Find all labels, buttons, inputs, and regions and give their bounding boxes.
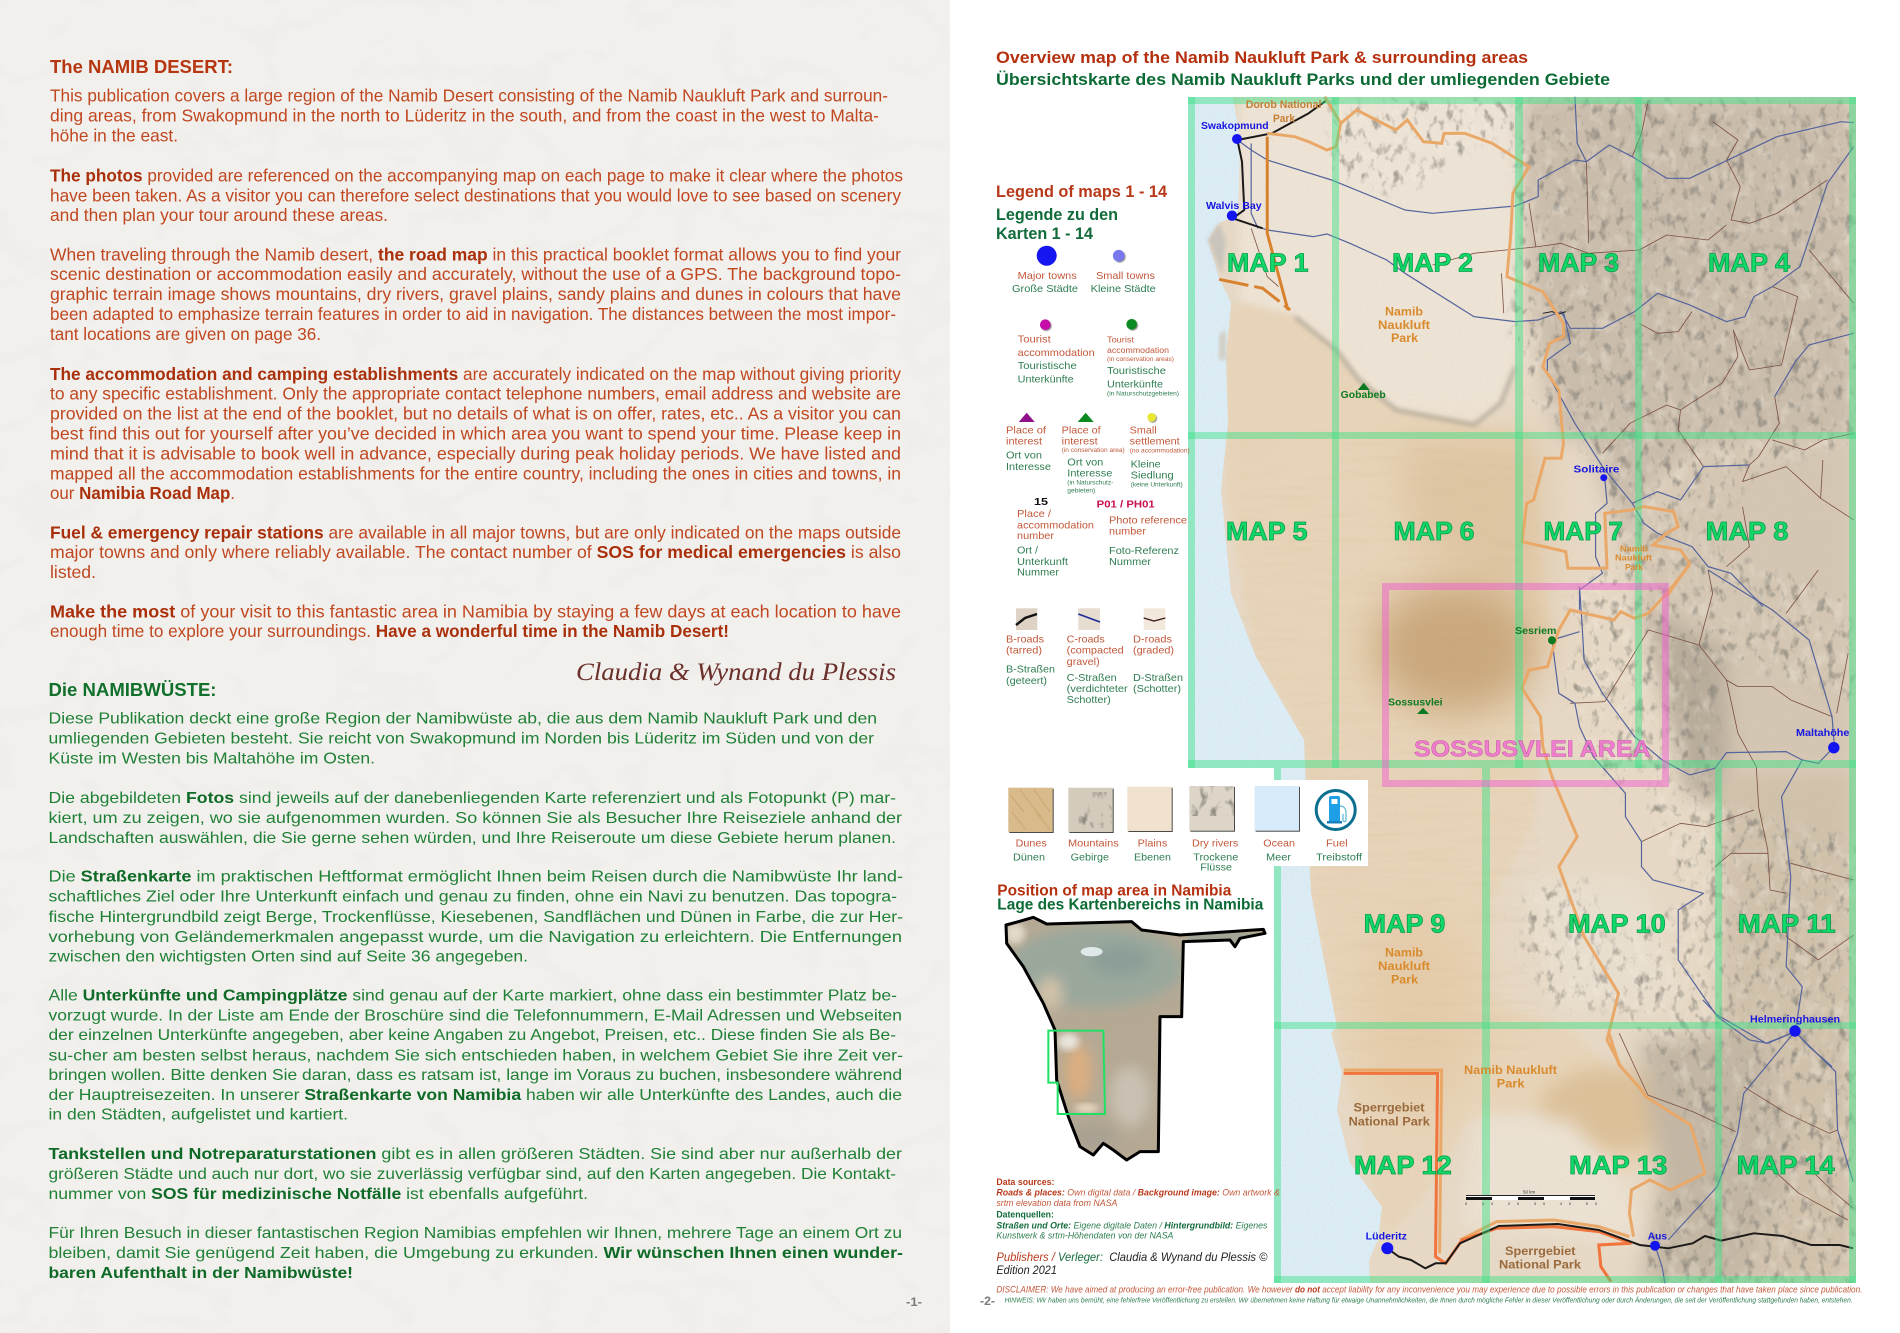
- paragraph: Straßenkarte: fische Hintergrundbild zeigt Berge, Trockenflüsse, Kiesebenen, Sandflächen und Dünen in Farbe, die zur Her-: [48, 909, 903, 926]
- map place names and markers: Sperrgebiet: [1505, 1246, 1576, 1258]
- text block: German introduction: [48, 679, 903, 1282]
- map place names and markers: Park: [1391, 974, 1419, 986]
- legend item: D-roads: D-Straßen: [1133, 672, 1183, 684]
- legend item: tourist accommodation in conservation areas: Unterkünfte: [1107, 379, 1163, 391]
- paragraph: accommodation and camping: [50, 364, 901, 503]
- paragraph: accommodation and camping: provided on the list at the end of the booklet, but no details of what is on offer, rates, etc.. As a visitor you can: [50, 404, 901, 424]
- paragraph: accommodation and camping: our Namibia Road Map.: [50, 483, 235, 503]
- publishers: Edition 2021: [996, 1263, 1057, 1277]
- legend item: major towns: Große Städte: [1012, 283, 1078, 295]
- swatch: mountains: Gebirge: [1071, 852, 1109, 864]
- legend item: tourist accommodation in conservation areas: (in Naturschutzgebieten): [1107, 391, 1179, 398]
- map grid strips: [1188, 97, 1856, 1283]
- paragraph: fuel and emergency: listed.: [50, 562, 96, 582]
- legend item: B-roads: B-Straßen: [1006, 664, 1055, 676]
- legend item: place of interest in conservation area: (in Naturschutz-: [1067, 479, 1113, 486]
- icon: fuel pump: [1316, 790, 1362, 864]
- paragraph: the photos: and then plan your tour around these areas.: [50, 205, 388, 225]
- legend item: place number: [1017, 496, 1094, 579]
- page number 1: -1-: [906, 1297, 922, 1309]
- panel: left page with marbled paper background: [0, 0, 950, 1333]
- paragraph: Fotos: Landschaften auswählen, die Sie gerne sehen würden, und Ihre Reiseroute um diese Gebiete herum planen.: [48, 830, 896, 847]
- map sheet labels: MAP 12: [1354, 1152, 1452, 1180]
- legend item: small towns: Small towns: [1096, 270, 1155, 282]
- heading: The Namib Desert: The NAMIB DESERT:: [50, 56, 233, 77]
- legend item: tourist accommodation: accommodation: [1018, 347, 1095, 359]
- legend item: place of interest in conservation area: Place of: [1062, 424, 1101, 436]
- legend item: tourist accommodation in conservation areas: (in conservation areas): [1107, 356, 1174, 363]
- map place names and markers: Solitaire: [1574, 464, 1620, 475]
- paragraph: make the most: enough time to explore your surroundings. Have a wonderful time in the Namib Desert!: [50, 621, 729, 641]
- heading: position of map area: Position of map area in Namibia: [997, 882, 1232, 899]
- legend item: C-roads: C-Straßen: [1067, 672, 1117, 684]
- heading: Die Namibwüste: Die NAMIBWÜSTE:: [48, 679, 216, 700]
- legend heading: Legend of maps 1 - 14: [996, 183, 1168, 201]
- data sources: [996, 1177, 1280, 1241]
- locator map of Namibia: [1003, 913, 1270, 1167]
- legend item: tourist accommodation in conservation areas: Touristische: [1107, 365, 1166, 377]
- icon: fuel pump: Fuel: [1326, 838, 1348, 850]
- legend: towns and accommodation: [996, 183, 1190, 706]
- legend item: C-roads: C-roads: [1067, 633, 1105, 645]
- legend item: place number: accommodation: [1017, 519, 1094, 531]
- legend item: tourist accommodation in conservation areas: accommodation: [1107, 345, 1169, 355]
- map sheet labels: MAP 3: [1538, 250, 1619, 278]
- legend item: B-roads: B-roads: [1006, 633, 1044, 645]
- map sheet labels: MAP 13: [1569, 1152, 1667, 1180]
- publishers: Publishers / Verleger: Claudia & Wynand du Plessis ©: [996, 1250, 1268, 1264]
- map: terrain overview with map grid: [1188, 97, 1856, 1283]
- paragraph: Publikation: Diese Publikation deckt eine große Region der Namibwüste ab, die aus dem Namib Naukluft Park und den: [48, 711, 877, 728]
- map sheet labels: MAP 6: [1394, 518, 1474, 546]
- legend item: tourist accommodation: Tourist: [1018, 334, 1051, 346]
- legend heading: Karten 1 - 14: [996, 225, 1094, 243]
- paragraph: Publikation: umliegenden Gebieten besteht. Sie reicht von Swakopmund im Norden bis Lüderitz im Süden und von der: [48, 731, 875, 748]
- paragraph: the road map: been adapted to emphasize terrain features in order to aid in navigation. The distances between the most impor-: [50, 304, 896, 324]
- disclaimer: HINWEIS: Wir haben uns bemüht, eine fehlerfreie Veröffentlichung zu erstellen. Wir übernehmen keine Haftung für etwaige Unannehmlichkeiten, die Ihnen durch mögliche Fehler in dieser Veröffentlichung oder durch Änderungen, die seit der Veröffentlichung stattgefunden haben, entstehen.: [1005, 1297, 1853, 1305]
- legend item: C-roads: Schotter): [1067, 694, 1111, 706]
- disclaimer: [996, 1285, 1862, 1305]
- map place names and markers: Dorob National: [1246, 99, 1321, 111]
- map place names and markers: Park: [1391, 333, 1419, 345]
- map place names and markers: Naukluft: [1378, 961, 1430, 973]
- legend item: C-roads: gravel): [1067, 656, 1100, 668]
- legend item: photo reference: Photo reference: [1109, 514, 1187, 526]
- swatch: plains: Ebenen: [1134, 852, 1171, 864]
- swatch: dunes: Dünen: [1013, 852, 1045, 864]
- legend item: photo reference: number: [1109, 525, 1147, 537]
- paragraph: accommodation and camping: to any specific establishment. Only the appropriate contact telephone numbers, email address and website are: [50, 384, 901, 404]
- data sources: Data sources:: [996, 1177, 1054, 1187]
- swatch: ocean: Ocean: [1263, 838, 1295, 850]
- paragraph: Fotos: kiert, um zu zeigen, wo sie aufgenommen wurden. So können Sie als Besucher Ihre Reiseziele anhand der: [48, 810, 903, 827]
- paragraph: Unterkünfte: [48, 988, 903, 1124]
- heading: overview map titles: Overview map of the Namib Naukluft Park & surrounding areas: [996, 48, 1528, 67]
- roads and park boundaries: north: [1219, 97, 1854, 610]
- legend item: place number: Nummer: [1017, 567, 1060, 579]
- paragraph: Tankstellen: nummer von SOS für medizinische Notfälle ist ebenfalls aufgeführt.: [48, 1186, 588, 1203]
- heading: position of map area: [997, 882, 1264, 913]
- legend item: C-roads: (verdichteter: [1067, 683, 1128, 695]
- paragraph: Straßenkarte: schaftliches Ziel oder Ihre Unterkunft einfach und genau zu finden, ohne ein Navi zu benutzen. Das topogra-: [48, 889, 897, 906]
- heading: overview map titles: [996, 48, 1610, 89]
- map place names and markers: Sesriem: [1515, 626, 1557, 637]
- legend item: place of interest in conservation area: [1062, 413, 1125, 494]
- legend item: place of interest in conservation area: gebieten): [1067, 487, 1095, 494]
- paragraph: the photos: have been taken. As a visitor you can therefore select destinations that you would love to see based on scenery: [50, 185, 901, 205]
- legend item: major towns: [1012, 246, 1078, 295]
- map place names and markers: Naukluft: [1615, 553, 1652, 563]
- map scale bar: [1465, 1190, 1598, 1206]
- map sheet labels: MAP 5: [1226, 518, 1308, 546]
- text block: English introduction: [50, 56, 903, 641]
- legend item: tourist accommodation: [1018, 319, 1095, 386]
- data sources: Datenquellen:: [996, 1210, 1054, 1220]
- swatch: dry rivers: Dry rivers: [1192, 838, 1238, 850]
- paragraph: accommodation and camping: The accommodation and camping establishments are accurately indicated on the map without giving priority: [50, 364, 901, 384]
- map place names and markers: Namib: [1385, 948, 1423, 960]
- legend item: place number: number: [1017, 530, 1055, 542]
- swatch: plains: Plains: [1138, 838, 1167, 850]
- map place names and markers: [1201, 99, 1850, 1271]
- map place names and markers: Maltahöhe: [1796, 728, 1850, 739]
- paragraph: Straßenkarte: zwischen den wichtigsten Orten sind auf Seite 36 angegeben.: [48, 948, 528, 965]
- legend item: small towns: [1091, 250, 1156, 295]
- legend item: photo reference: Foto-Referenz: [1109, 545, 1179, 557]
- swatch: dry rivers: Flüsse: [1200, 862, 1232, 874]
- paragraph: the road map: tant locations are given on page 36.: [50, 324, 321, 344]
- map place names and markers: National Park: [1499, 1259, 1582, 1271]
- legend item: place of interest: Place of: [1006, 424, 1046, 436]
- signature: Claudia & Wynand du Plessis: [576, 659, 896, 686]
- swatch: ocean: [1255, 786, 1300, 864]
- map place names and markers: Park: [1497, 1078, 1525, 1090]
- map place names and markers: Naukluft: [1378, 320, 1430, 332]
- legend item: tourist accommodation: Unterkünfte: [1018, 374, 1074, 386]
- map place names and markers: Namib: [1385, 307, 1423, 319]
- legend item: place of interest in conservation area: interest: [1062, 436, 1098, 448]
- paragraph: the photos: The photos provided are referenced on the accompanying map on each page to make it clear where the photos: [50, 166, 903, 186]
- Sossusvlei area label: SOSSUSVLEI AREA: [1414, 736, 1651, 762]
- ocean: [1188, 97, 1382, 1283]
- legend item: small settlement: [1130, 413, 1190, 489]
- publishers: [996, 1250, 1268, 1277]
- Sossusvlei area frame: [1386, 586, 1666, 784]
- legend item: small settlement: Small: [1130, 424, 1157, 436]
- map place names and markers: Namib: [1620, 544, 1648, 554]
- paragraph: the photos: [50, 166, 903, 225]
- map place names and markers: Park: [1273, 113, 1296, 125]
- swatch: ocean: Meer: [1266, 852, 1292, 864]
- map place names and markers: Aus: [1648, 1231, 1667, 1242]
- paragraph: Unterkünfte: in den Städten, aufgelistet und kartiert.: [48, 1106, 348, 1124]
- legend: terrain swatches panel: [1000, 780, 1368, 874]
- map place names and markers: National Park: [1349, 1116, 1430, 1128]
- icon: fuel pump: Treibstoff: [1316, 852, 1362, 864]
- legend item: C-roads: (compacted: [1067, 645, 1124, 657]
- paragraph: publication scope: ding areas, from Swakopmund in the north to Lüderitz in the south, and from the coast in the west to Malta-: [50, 106, 879, 126]
- legend item: place number: Unterkunft: [1017, 556, 1068, 568]
- paragraph: Tankstellen: [48, 1146, 903, 1203]
- legend item: B-roads: (tarred): [1006, 645, 1042, 657]
- map place names and markers: Swakopmund: [1201, 121, 1269, 132]
- swatch: dunes: Dunes: [1016, 838, 1047, 850]
- roads and park boundaries: centre: [1522, 565, 1854, 1067]
- legend item: place of interest: [1006, 413, 1051, 473]
- map scale bar: 50 km: [1523, 1190, 1536, 1194]
- data sources: Kunstwerk & srtm-Höhendaten von der NASA: [996, 1231, 1173, 1241]
- paragraph: Besuch: bleiben, damit Sie genügend Zeit haben, die Umgebung zu erkunden. Wir wünschen Ihnen einen wunder-: [48, 1245, 903, 1262]
- paragraph: Tankstellen: Tankstellen und Notreparaturstationen gibt es in allen größeren Städten. Sie sind aber nur außerhalb der: [48, 1146, 903, 1163]
- map scale bar: 0 10 20 30 40 50: [1465, 1201, 1598, 1206]
- swatch: mountains: Mountains: [1068, 838, 1119, 850]
- paragraph: Fotos: [48, 790, 903, 847]
- data sources: srtm elevation data from NASA: [996, 1198, 1117, 1208]
- paragraph: Besuch: Für Ihren Besuch in dieser fantastischen Region Namibias empfehlen wir Ihnen, mehrere Tage an einem Ort zu: [48, 1225, 902, 1242]
- map sheet labels: MAP 7: [1544, 518, 1623, 546]
- legend item: place of interest: Interesse: [1006, 461, 1051, 473]
- paragraph: make the most: Make the most of your visit to this fantastic area in Namibia by staying a few days at each location to have: [50, 602, 901, 622]
- legend item: small settlement: (keine Unterkunft): [1131, 482, 1183, 489]
- map place names and markers: Sperrgebiet: [1354, 1103, 1425, 1115]
- paragraph: make the most: [50, 602, 901, 641]
- paragraph: Straßenkarte: [48, 869, 903, 965]
- terrain background: [1188, 97, 1856, 1283]
- map sheet labels: MAP 11: [1738, 911, 1836, 939]
- map sheet labels: MAP 4: [1708, 250, 1791, 278]
- legend item: D-roads: [1133, 608, 1183, 695]
- swatch: mountains: [1068, 788, 1119, 864]
- paragraph: Tankstellen: größeren Städte und auch nur dort, wo sie zuverlässig verfügbar sind, auf den Karten angegeben. Die Kontakt-: [48, 1166, 896, 1183]
- locator frame of map area: [1048, 1031, 1105, 1114]
- map sheet labels: MAP 2: [1392, 250, 1473, 278]
- legend item: B-roads: (geteert): [1006, 675, 1047, 687]
- legend item: D-roads: D-roads: [1133, 633, 1172, 645]
- swatch: plains: [1127, 787, 1173, 864]
- page number 2: -2-: [980, 1296, 995, 1308]
- paragraph: Publikation: [48, 711, 877, 767]
- legend item: small settlement: Kleine: [1131, 458, 1161, 470]
- paragraph: Besuch: [48, 1225, 903, 1282]
- paragraph: accommodation and camping: mapped all the accommodation establishments for the entire country, including the ones in cities and towns, in: [50, 463, 901, 483]
- paragraph: Publikation: Küste im Westen bis Maltahöhe im Osten.: [48, 750, 375, 767]
- paragraph: the road map: When traveling through the Namib desert, the road map in this practical booklet format allows you to find your: [50, 244, 901, 264]
- paragraph: Unterkünfte: der Hauptreisezeiten. In unserer Straßenkarte von Namibia haben wir alle Unterkünfte des Landes, auch die: [48, 1087, 902, 1104]
- paragraph: fuel and emergency: major towns and only where reliably available. The contact number of SOS for medical emergencies is also: [50, 542, 901, 562]
- legend item: place of interest in conservation area: Interesse: [1067, 468, 1112, 480]
- legend item: place number: 15: [1034, 496, 1048, 508]
- paragraph: accommodation and camping: mind that it is advisable to book well in advance, especially during peak holiday periods. We have listed and: [50, 443, 901, 463]
- legend item: place number: Place /: [1017, 508, 1051, 520]
- map sheet labels: [1226, 250, 1836, 1180]
- swatch: dry rivers: [1189, 786, 1238, 874]
- paragraph: Straßenkarte: vorhebung von Geländemerkmalen angepasst wurde, um die Navigation zu erleichtern. Die Entfernungen: [48, 929, 902, 946]
- paragraph: Unterkünfte: bringen wollen. Bitte denken Sie daran, dass es ratsam ist, lange im Voraus zu buchen, insbesondere während: [48, 1067, 902, 1084]
- legend item: place of interest: Ort von: [1006, 450, 1042, 462]
- map sheet labels: MAP 8: [1706, 518, 1788, 546]
- legend item: D-roads: (Schotter): [1133, 683, 1181, 695]
- map place names and markers: Walvis Bay: [1206, 201, 1262, 212]
- legend item: tourist accommodation in conservation areas: Tourist: [1107, 335, 1135, 345]
- paragraph: the road map: graphic terrain image shows mountains, dry rivers, gravel plains, sandy plains and dunes in colours that have: [50, 284, 901, 304]
- map sheet labels: MAP 1: [1227, 250, 1308, 278]
- paragraph: publication scope: This publication covers a large region of the Namib Desert consisting of the Namib Naukluft Park and surroun-: [50, 86, 888, 106]
- paragraph: Unterkünfte: der einzelnen Unterkünfte angegeben, aber keine Angaben zu Angebot, Preisen, etc.. Diese finden Sie als Be-: [48, 1027, 896, 1044]
- paragraph: fuel and emergency: [50, 522, 901, 582]
- legend item: tourist accommodation: Touristische: [1018, 360, 1077, 372]
- legend item: tourist accommodation in conservation areas: [1107, 319, 1179, 398]
- paragraph: the road map: [50, 244, 901, 344]
- paragraph: publication scope: höhe in the east.: [50, 126, 178, 146]
- paragraph: accommodation and camping: best find this out for yourself after you’ve decided in which area you want to spend your time. Please keep in: [50, 424, 901, 444]
- legend item: small settlement: settlement: [1130, 436, 1180, 448]
- paragraph: Unterkünfte: vorzugt wurde. In der Liste am Ende der Broschüre sind die Telefonnummern, E-Mail Adressen und Webseiten: [48, 1008, 902, 1025]
- map place names and markers: Lüderitz: [1366, 1231, 1407, 1242]
- legend item: small settlement: Siedlung: [1131, 469, 1174, 481]
- paragraph: publication scope: [50, 86, 888, 146]
- data sources: Roads & places: Own digital data / Background image: Own artwork &: [996, 1188, 1280, 1198]
- swatch: dunes: [1008, 788, 1054, 864]
- legend item: photo reference: Nummer: [1109, 556, 1152, 568]
- heading: overview map titles: Übersichtskarte des Namib Naukluft Parks und der umliegenden Gebiete: [996, 70, 1610, 89]
- legend item: place of interest in conservation area: (in conservation area): [1062, 447, 1125, 454]
- paragraph: Straßenkarte: Die Straßenkarte im praktischen Heftformat ermöglicht Ihnen beim Reisen durch die Namibwüste Ihr land-: [48, 869, 903, 886]
- map sheet labels: MAP 10: [1568, 911, 1666, 939]
- legend item: major towns: Major towns: [1018, 270, 1077, 282]
- map place names and markers: Namib Naukluft: [1464, 1065, 1557, 1077]
- legend item: small towns: Kleine Städte: [1091, 283, 1156, 295]
- paragraph: Unterkünfte: su-cher am besten selbst heraus, nachdem Sie sich entschieden haben, in welchem Gebiet Sie ihre Zeit ver-: [48, 1047, 903, 1064]
- map place names and markers: Sossusvlei: [1388, 698, 1443, 709]
- legend item: photo reference: P01 / PH01: [1097, 499, 1155, 511]
- paragraph: Fotos: Die abgebildeten Fotos sind jeweils auf der danebenliegenden Karte referenziert und als Fotopunkt (P) mar-: [48, 790, 896, 807]
- heading: position of map area: Lage des Kartenbereichs in Namibia: [997, 896, 1264, 913]
- map sheet labels: MAP 9: [1364, 911, 1445, 939]
- paragraph: the road map: scenic destination or accommodation easily and accurately, without the use of a GPS. The background topo-: [50, 264, 901, 284]
- legend item: C-roads: [1067, 608, 1128, 706]
- paragraph: fuel and emergency: Fuel & emergency repair stations are available in all major towns, but are only indicated on the maps outside: [50, 522, 901, 542]
- map sheet labels: MAP 14: [1737, 1152, 1836, 1180]
- legend item: B-roads: [1006, 608, 1055, 687]
- roads and park boundaries: south: [1344, 1000, 1853, 1283]
- legend item: D-roads: (graded): [1133, 645, 1174, 657]
- swatch: dry rivers: Trockene: [1193, 852, 1238, 864]
- map place names and markers: Park: [1625, 562, 1643, 572]
- legend heading: [996, 183, 1168, 243]
- legend item: place of interest in conservation area: Ort von: [1067, 457, 1103, 469]
- legend item: place of interest: interest: [1006, 436, 1042, 448]
- map place names and markers: Helmeringhausen: [1750, 1015, 1840, 1026]
- paragraph: Unterkünfte: Alle Unterkünfte und Campingplätze sind genau auf der Karte markiert, ohne dass ein bestimmter Platz be-: [48, 988, 897, 1005]
- legend heading: Legende zu den: [996, 206, 1118, 224]
- legend item: photo reference: [1097, 499, 1187, 568]
- map place names and markers: Gobabeb: [1341, 390, 1386, 401]
- legend item: place number: Ort /: [1017, 545, 1038, 557]
- legend item: small settlement: (no accommodation): [1130, 448, 1190, 455]
- data sources: Straßen und Orte: Eigene digitale Daten / Hintergrundbild: Eigenes: [996, 1220, 1268, 1230]
- paragraph: Besuch: baren Aufenthalt in der Namibwüste!: [48, 1265, 353, 1282]
